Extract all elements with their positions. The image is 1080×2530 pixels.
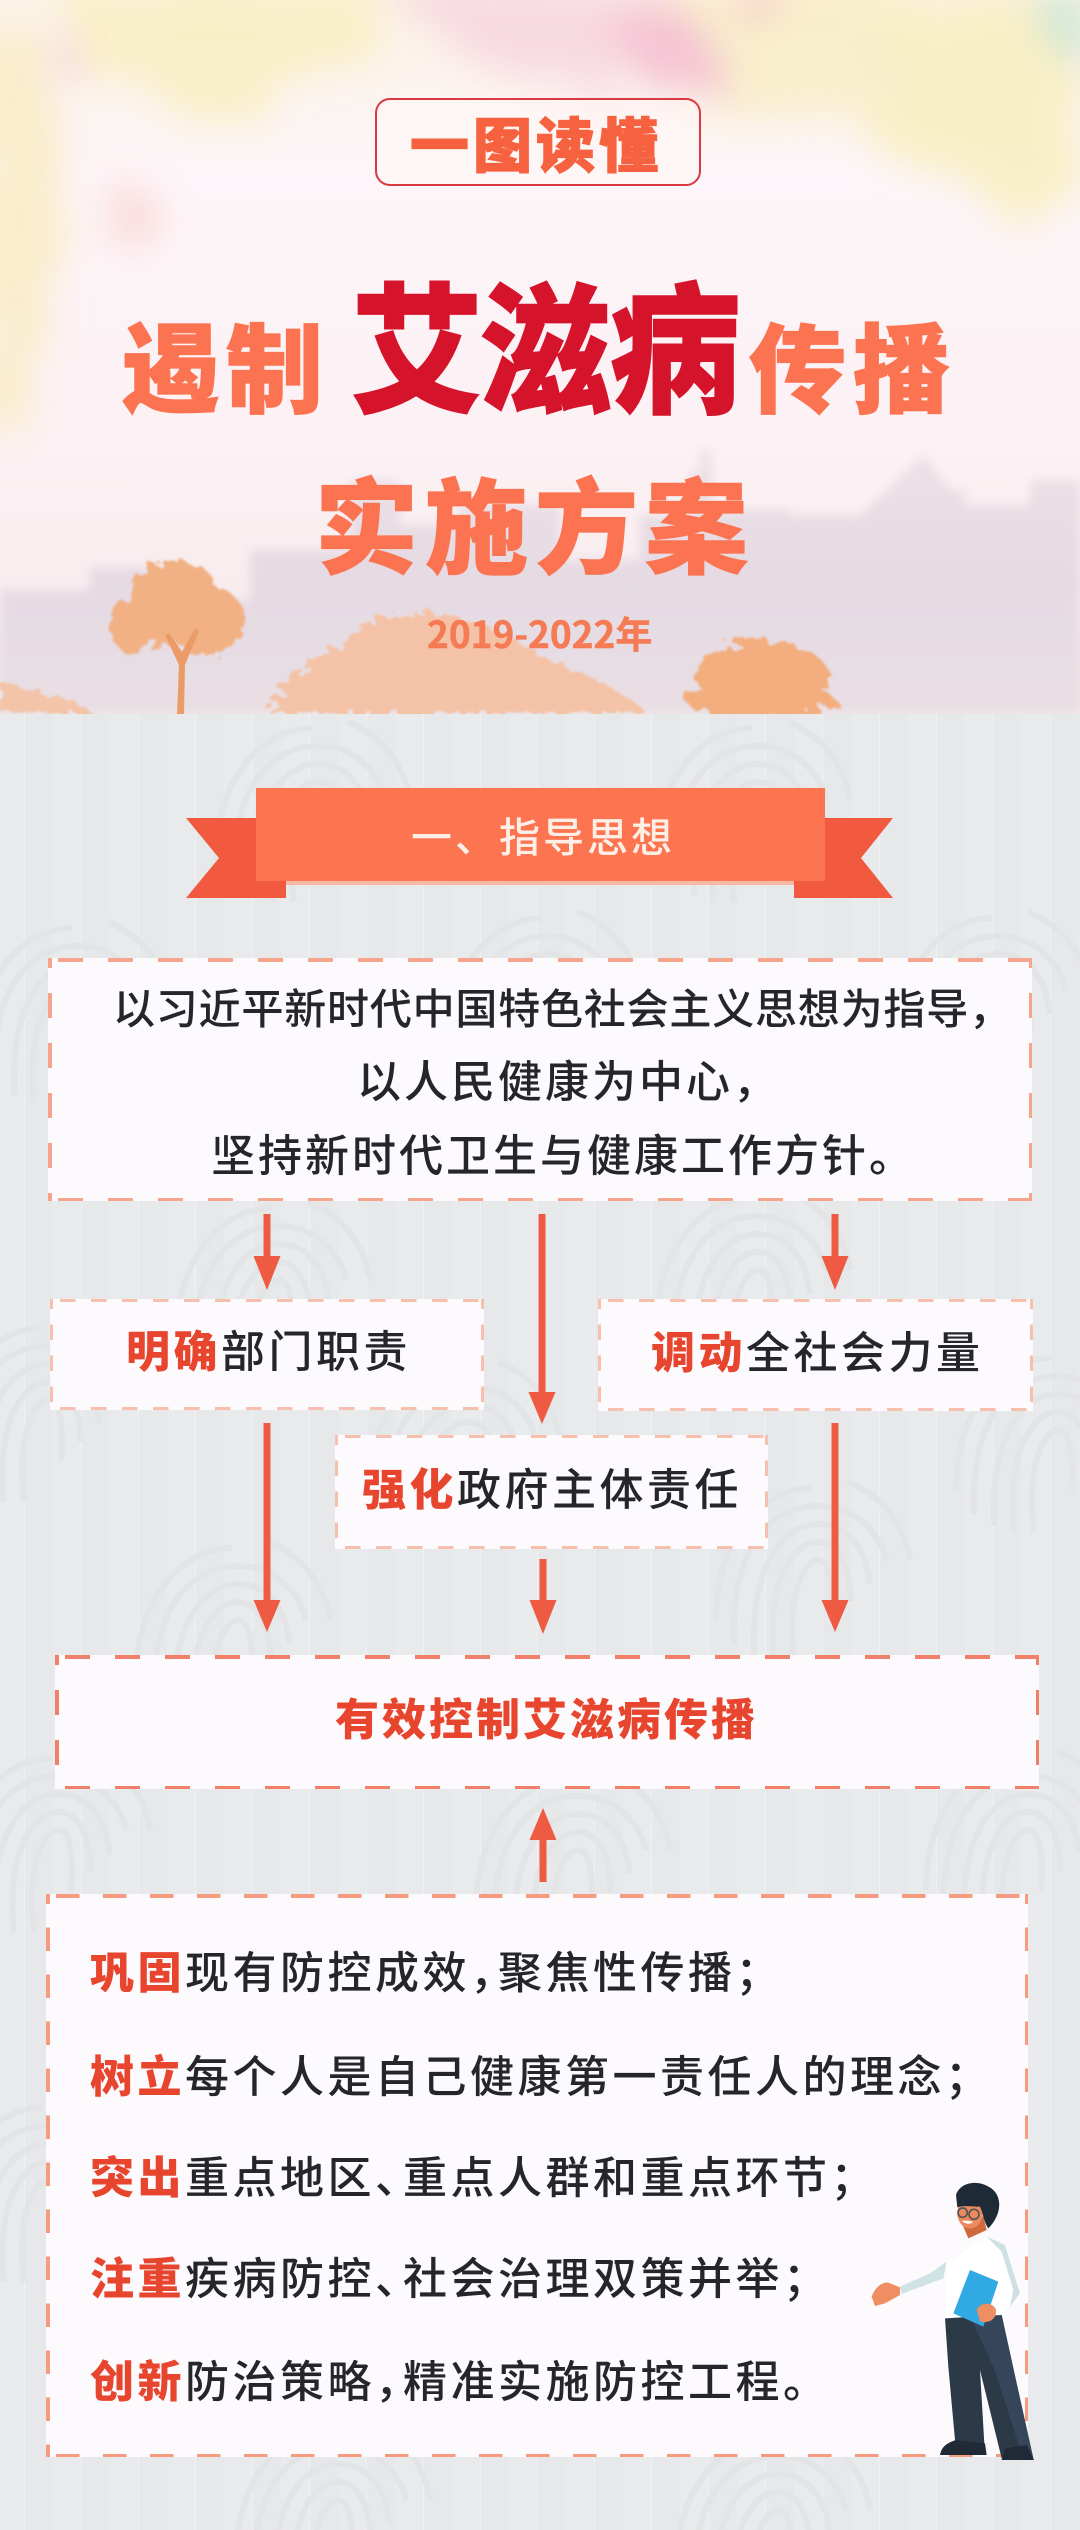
principle 1: 巩固现有防控成效，聚焦性传播； [90, 1949, 783, 1998]
section ribbon [186, 788, 893, 898]
panel: goal [55, 1655, 1039, 1789]
panel: government responsibility [335, 1435, 768, 1549]
ideology line 2: 以人民健康为中心， [357, 1058, 780, 1107]
panel: guiding ideology [48, 958, 1032, 1201]
panel: mobilize society: 调动全社会力量 [651, 1329, 984, 1378]
icon: presenter figure [872, 2182, 1034, 2460]
panel: clarify department duties [50, 1299, 484, 1410]
principle 3: 突出重点地区、重点人群和重点环节； [90, 2154, 878, 2203]
ideology line 3: 坚持新时代卫生与健康工作方针。 [211, 1132, 916, 1181]
title line 1: 艾滋病 [351, 239, 738, 444]
ideology line 1: 以习近平新时代中国特色社会主义思想为指导， [113, 986, 1012, 1033]
hills and tree foliage [0, 560, 834, 718]
title line 1: 传播 [749, 292, 957, 433]
arrows [254, 1214, 848, 1882]
principle 2: 树立每个人是自己健康第一责任人的理念； [90, 2053, 992, 2102]
principle 4: 注重疾病防控、社会治理双策并举； [90, 2255, 830, 2304]
page background with stripes and fingerprint watermarks [0, 714, 1080, 2530]
panel: principles list [46, 1894, 1028, 2457]
panel: clarify department duties: 明确部门职责 [126, 1328, 411, 1377]
panel: mobilize society [598, 1299, 1033, 1411]
title line 2: 实施方案 [315, 446, 755, 595]
date range: 2019-2022年 [427, 605, 652, 659]
section heading: 一、指导思想 [411, 804, 675, 864]
title line 1 [122, 239, 957, 444]
title line 1: 遏制 [122, 292, 330, 433]
tag: 一图读懂: 一图读懂 [410, 99, 662, 184]
principle 5: 创新防治策略，精准实施防控工程。 [90, 2358, 830, 2407]
panel: government responsibility: 强化政府主体责任 [362, 1466, 742, 1515]
hero: watercolor background with skyline and trees [0, 0, 1080, 714]
panel: goal: 有效控制艾滋病传播 [335, 1696, 758, 1745]
